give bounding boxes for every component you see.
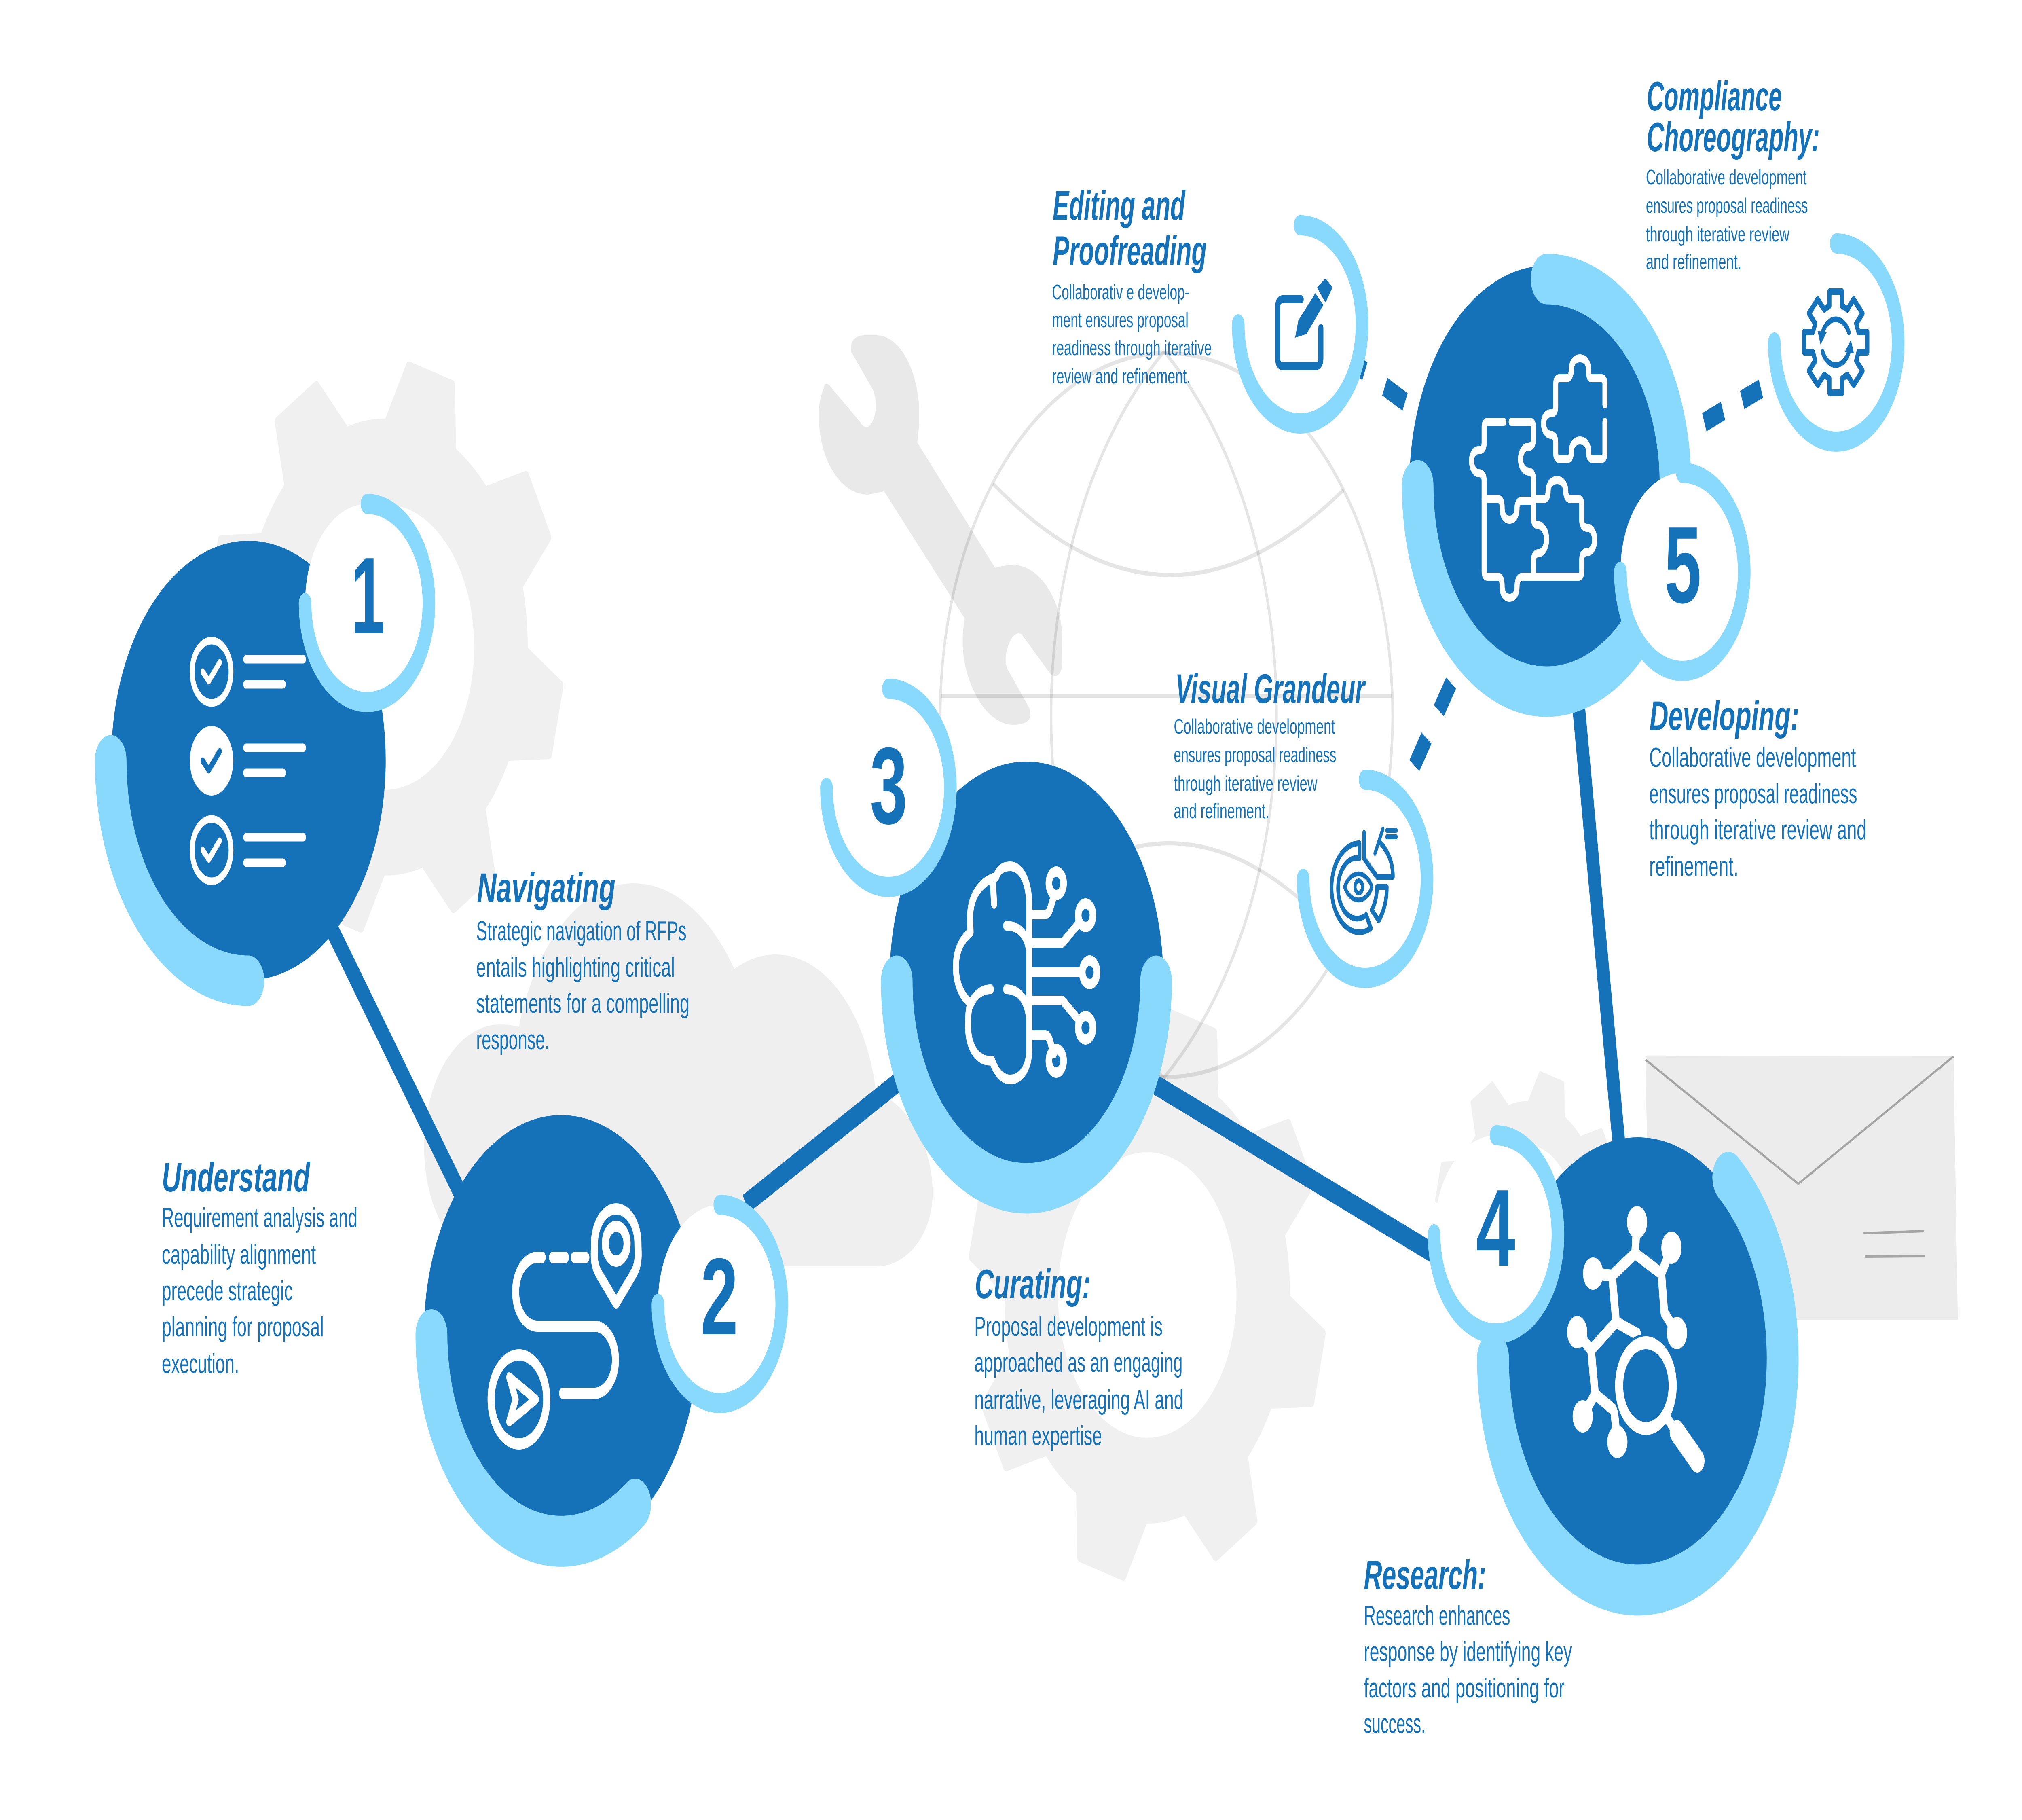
text block: Developing: through iterative review and (1649, 815, 1867, 846)
connectors: dashed links (1347, 358, 1761, 766)
background: wrench (819, 335, 1062, 725)
text block: Research: factors and positioning for (1364, 1673, 1565, 1704)
panel: step 3 (827, 689, 1163, 1200)
text block: Editing and Proofreading: review and refinement. (1052, 365, 1191, 388)
text block: Visual Grandeur (1174, 666, 1366, 823)
text block: Developing: Developing: (1650, 693, 1799, 739)
text block: Curating: Proposal development is (974, 1312, 1163, 1342)
text block: Understand: capability alignment (162, 1240, 316, 1270)
background: cloud (424, 883, 933, 1266)
text block: Compliance Choreography (1646, 74, 1820, 274)
number badge 1 (305, 504, 429, 702)
text block: Compliance Choreography: through iterative review (1646, 223, 1790, 246)
text block: Navigating (476, 865, 690, 1056)
text block: Developing: Collaborative development (1649, 743, 1856, 773)
text block: Compliance Choreography: Choreography: (1647, 114, 1820, 161)
text block: Curating: human expertise (974, 1421, 1102, 1452)
panel: step 2 (424, 1115, 782, 1554)
text block: Visual Grandeur: Collaborative development (1174, 715, 1335, 739)
main circle (111, 541, 386, 980)
background: gear top left (206, 360, 564, 934)
main circle (424, 1115, 698, 1554)
text block: Navigating: entails highlighting critical (476, 952, 675, 983)
text block: Developing: ensures proposal readiness (1649, 779, 1857, 810)
progress ring (431, 1335, 635, 1541)
number badge 4: 4 (1476, 1166, 1515, 1289)
icon: puzzle pieces (1472, 358, 1605, 598)
progress ring (1418, 279, 1675, 692)
text block: Research: Research enhances (1364, 1601, 1510, 1632)
text block: Navigating: Navigating (477, 865, 615, 911)
icon: route map (491, 1209, 638, 1444)
text block: Editing and Proofreading: Proofreading (1053, 228, 1207, 274)
text block: Editing and Proofreading: Collaborativ e develop- (1052, 281, 1189, 304)
text block: Visual Grandeur: through iterative review (1174, 772, 1318, 796)
text block: Curating: narrative, leveraging AI and (974, 1385, 1183, 1416)
progress ring (897, 981, 1156, 1188)
text block: Understand: precede strategic (162, 1276, 293, 1307)
text block: Curating: approached as an engaging (974, 1348, 1182, 1378)
text block: Understand: Requirement analysis and (162, 1203, 357, 1234)
number badge 4 (1434, 1135, 1558, 1333)
icon: molecule search (1567, 1206, 1697, 1461)
background: envelope (1646, 1056, 1958, 1320)
text block: Curating (974, 1261, 1183, 1452)
text block: Developing (1649, 693, 1867, 882)
connectors: main path (316, 663, 1620, 1261)
number badge 1: 1 (351, 534, 385, 657)
text block: Navigating: statements for a compelling (476, 988, 690, 1019)
text block: Compliance Choreography: ensures proposal readiness (1646, 194, 1808, 218)
text block: Understand: planning for proposal (162, 1312, 324, 1343)
number badge 3: 3 (870, 724, 907, 847)
text block: Developing: refinement. (1649, 851, 1739, 882)
icon badge: visual grandeur (1303, 780, 1427, 978)
background: gear centre (968, 1008, 1326, 1582)
icon: checklist (190, 641, 303, 881)
main circle (1409, 266, 1684, 705)
text block: Editing and Proofreading: Editing and (1053, 183, 1186, 229)
text block: Visual Grandeur: Visual Grandeur (1175, 666, 1366, 712)
number badge 2: 2 (700, 1235, 738, 1358)
panel: step 5 (1409, 266, 1744, 705)
icon: pencil on square (1277, 280, 1331, 366)
panel: step 1 (111, 504, 429, 981)
text block: Visual Grandeur: ensures proposal readiness (1174, 743, 1336, 767)
text block: Editing and Proofreading (1052, 183, 1212, 388)
text block: Visual Grandeur: and refinement. (1174, 800, 1269, 823)
text block: Understand: execution. (162, 1349, 239, 1380)
background: small gear (1435, 1071, 1621, 1369)
text block: Navigating: response. (476, 1025, 550, 1056)
main circle (1500, 1137, 1776, 1579)
icon: gear with arrows (1804, 292, 1868, 393)
text block: Understand (162, 1155, 357, 1380)
icon badge: editing (1238, 225, 1362, 423)
main circle (889, 762, 1163, 1200)
text block: Compliance Choreography: and refinement. (1646, 250, 1741, 274)
number badge 5 (1620, 473, 1744, 671)
number badge 5: 5 (1665, 504, 1701, 626)
icon: AI brain (956, 866, 1097, 1079)
icon: eye on pie chart (1332, 829, 1396, 932)
background: globe outline (940, 351, 1393, 1078)
number badge 3 (827, 689, 950, 887)
text block: Research: success. (1364, 1709, 1426, 1740)
text block: Research: response by identifying key (1364, 1637, 1572, 1668)
text block: Compliance Choreography: Collaborative development (1646, 166, 1807, 189)
panel: step 4 (1434, 1135, 1783, 1590)
text block: Editing and Proofreading: readiness through iterative (1052, 336, 1212, 360)
text block: Research (1364, 1552, 1572, 1740)
progress ring (1493, 1177, 1783, 1590)
progress ring (111, 760, 248, 981)
text block: Understand: Understand (162, 1155, 311, 1201)
text block: Research: Research: (1364, 1552, 1486, 1598)
text block: Curating: Curating: (975, 1261, 1091, 1308)
text block: Navigating: Strategic navigation of RFPs (476, 916, 687, 947)
text block: Compliance Choreography: Compliance (1647, 74, 1782, 120)
number badge 2 (658, 1205, 782, 1403)
icon badge: compliance (1775, 243, 1898, 442)
text block: Editing and Proofreading: ment ensures proposal (1052, 309, 1189, 332)
